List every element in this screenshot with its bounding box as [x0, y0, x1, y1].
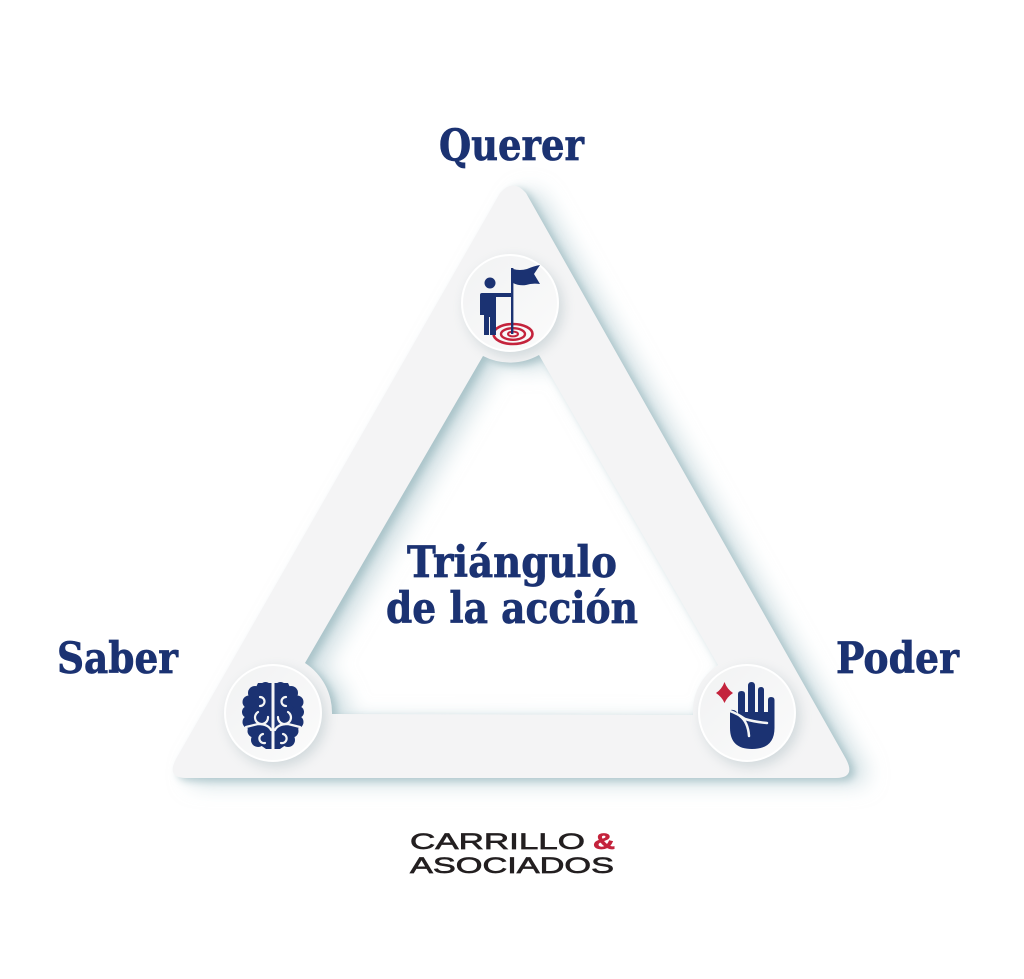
central title: Triángulo de la acción: Triángulo: [407, 538, 617, 588]
triangle frame: [173, 186, 849, 778]
title: Poder: Poder: [836, 634, 960, 684]
node: Poder: [699, 665, 795, 761]
icon: person with flag on target: [480, 265, 540, 344]
title: Querer: Querer: [439, 121, 585, 171]
icon: raised hand: [716, 682, 774, 749]
node: Querer: [462, 255, 558, 351]
logo: Carrillo & Asociados: [410, 829, 615, 878]
central title: Triángulo de la acción: [386, 538, 638, 634]
central title: Triángulo de la acción: de la acción: [386, 584, 638, 634]
logo: Carrillo & Asociados: ASOCIADOS: [410, 853, 614, 878]
logo: Carrillo & Asociados: &: [593, 829, 615, 854]
logo: Carrillo & Asociados: CARRILLO: [410, 829, 585, 854]
icon: brain: [242, 682, 304, 749]
node: Saber: [225, 665, 321, 761]
title: Saber: Saber: [57, 634, 179, 684]
